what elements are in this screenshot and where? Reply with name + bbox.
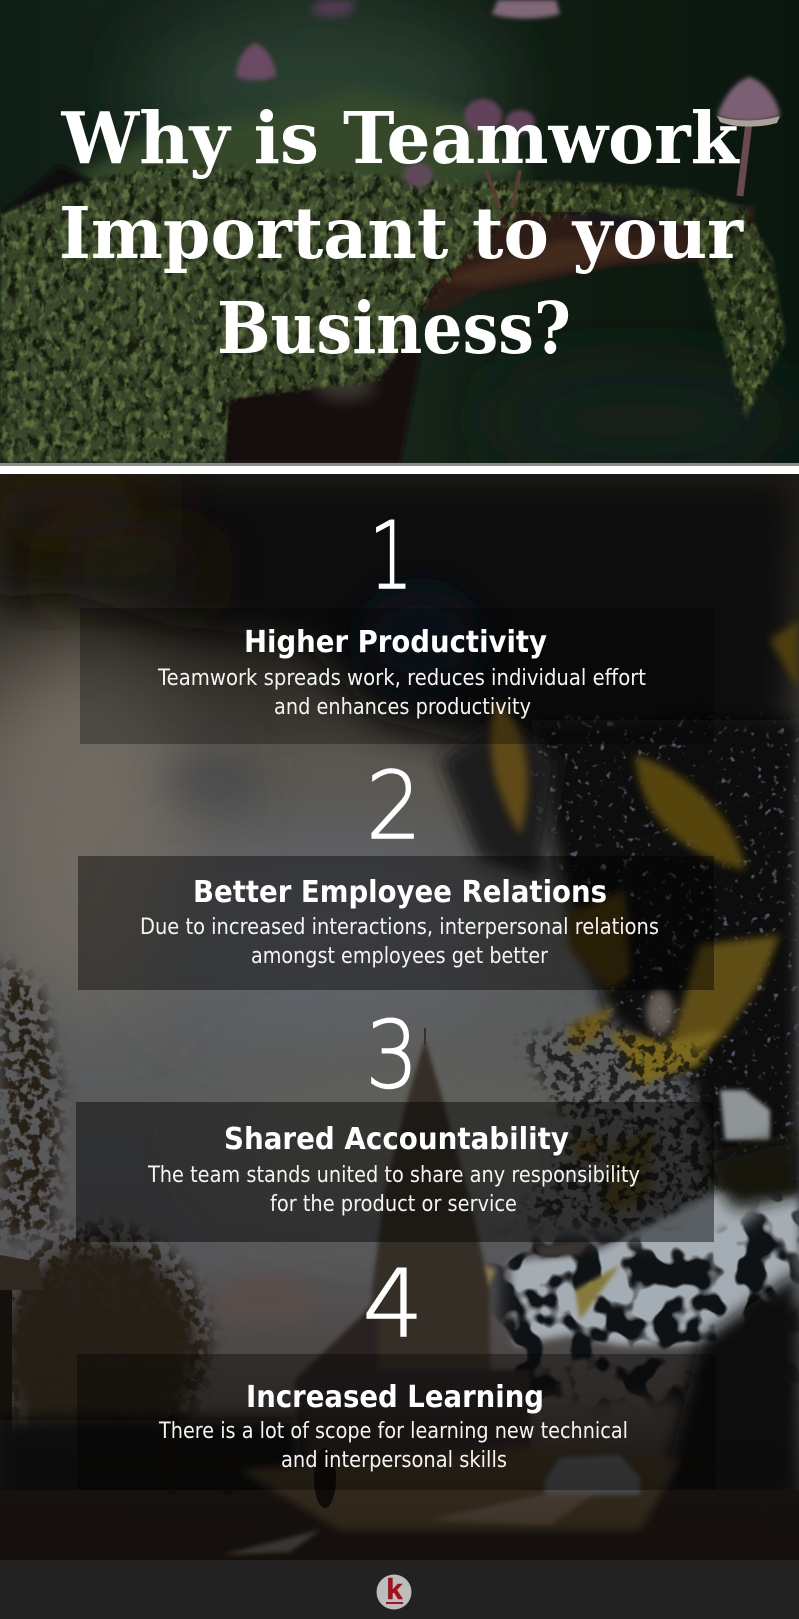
bright sky patches through leaves — [483, 1087, 799, 1490]
panel: hero photo of moss and mushrooms — [0, 0, 799, 470]
text: description 4 — [158, 1419, 628, 1473]
number 4: 4 — [362, 1250, 424, 1358]
divider: white band — [0, 463, 799, 474]
icon: k logo: k — [386, 1574, 403, 1606]
people silhouettes — [160, 1415, 336, 1508]
text: description 3: The team stands united to share any responsibility — [147, 1163, 640, 1188]
heading: title: Business? — [217, 286, 571, 370]
panel: item 4 — [77, 1250, 716, 1490]
text: description 2: Due to increased interactions, interpersonal relations — [140, 915, 659, 940]
panel: item 3 — [76, 1001, 714, 1242]
panel box 2 — [78, 856, 714, 990]
parked car — [545, 1455, 640, 1495]
text: description 3 — [147, 1163, 640, 1217]
panel: background photo of church and leaves — [0, 474, 799, 1560]
panel: item 2 — [78, 752, 714, 990]
text: description 3: for the product or service — [270, 1192, 517, 1217]
panel box 1 — [80, 608, 714, 744]
icon: mushroom right — [717, 77, 780, 196]
text: description 1: and enhances productivity — [274, 695, 531, 720]
heading: title: Important to your — [59, 191, 745, 275]
cloud near tower — [228, 1282, 302, 1318]
heading: Increased Learning: Increased Learning — [246, 1380, 544, 1415]
ground — [0, 1445, 799, 1560]
right dark tree — [530, 720, 799, 1220]
heading: Higher Productivity: Higher Productivity — [244, 625, 547, 660]
number 1: 1 — [369, 502, 413, 610]
text: description 2 — [140, 915, 659, 969]
leaves — [491, 620, 799, 1215]
top dark foliage — [0, 474, 799, 780]
heading: Shared Accountability: Shared Accountability — [224, 1122, 569, 1157]
text: description 1: Teamwork spreads work, reduces individual effort — [157, 666, 646, 691]
text: description 4: There is a lot of scope for learning new technical — [158, 1419, 628, 1444]
panel: item 1 — [80, 502, 714, 744]
icon: mushroom left — [234, 41, 278, 83]
panel box 4 — [77, 1354, 716, 1490]
number 2: 2 — [366, 752, 422, 860]
text: description 4: and interpersonal skills — [281, 1448, 507, 1473]
text: description 1 — [157, 666, 646, 720]
heading: Better Employee Relations: Better Employee Relations — [193, 875, 607, 910]
church tower — [295, 1028, 530, 1480]
icon: mushroom top right — [490, 0, 562, 22]
icon: mushrooms centre — [403, 99, 535, 208]
icon: k logo — [376, 1574, 412, 1610]
heading: title: Why is Teamwork — [61, 96, 740, 180]
footer bar — [0, 1560, 799, 1619]
icon: mushroom top blurred — [310, 0, 355, 17]
left trees — [0, 930, 300, 1510]
sky twigs — [516, 1017, 745, 1234]
heading: title — [59, 96, 745, 370]
text: description 2: amongst employees get better — [251, 944, 549, 969]
panel box 3 — [76, 1102, 714, 1242]
branch — [400, 205, 755, 312]
number 3: 3 — [366, 1001, 418, 1109]
